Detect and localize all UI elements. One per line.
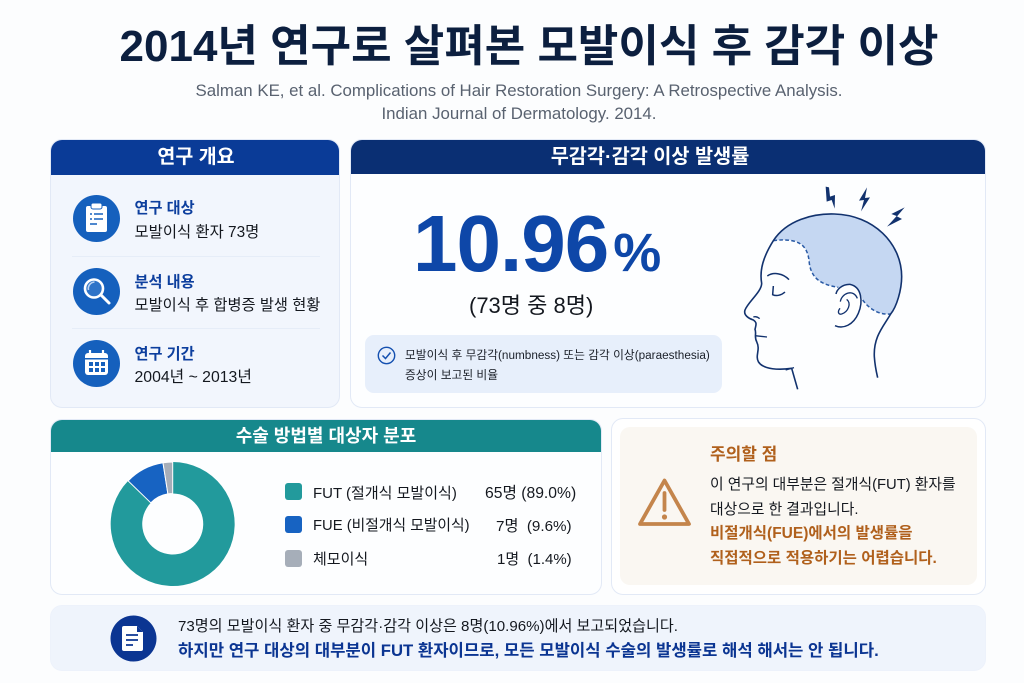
heading: study overview [50, 139, 340, 175]
citation: Indian Journal of Dermatology. 2014. [382, 104, 656, 123]
icon: head with affected scalp and lightning bolts [744, 186, 905, 390]
caution heading: 주의할 점 [710, 444, 777, 464]
legend label: FUT: FUT (절개식 모발이식) [313, 484, 457, 502]
summary line 2: 하지만 연구 대상의 대부분이 FUT 환자이므로, 모든 모발이식 수술의 발생률로 해석 해서는 안 됩니다. [178, 641, 879, 660]
note text: 모발이식 후 무감각(numbness) 또는 감각 이상(paraesthesia) [405, 349, 710, 362]
caution text: 대상으로 한 결과입니다. [710, 502, 858, 518]
heading: incidence: 무감각·감각 이상 발생률 [551, 146, 749, 168]
icon: warning triangle [638, 478, 691, 526]
legend value: body hair: 1명 (1.4%) [497, 550, 572, 568]
heading: distribution: 수술 방법별 대상자 분포 [236, 426, 416, 446]
title: 2014년 연구로 살펴본 모발이식 후 감각 이상 [120, 22, 938, 71]
legend swatch: body hair [285, 550, 302, 567]
divider row: analysis [72, 140, 320, 329]
panel: distribution by surgical method [50, 419, 602, 595]
donut chart [110, 462, 235, 586]
caution text [710, 476, 956, 566]
label: analysis content: 분석 내용 [134, 274, 195, 290]
icon: check [378, 346, 396, 364]
label: study period: 연구 기간 [134, 346, 195, 362]
citation: Salman KE, et al. Complications of Hair Restoration Surgery: A Retrospective Analysis. [196, 81, 842, 100]
text: study subject: 모발이식 환자 73명 [134, 224, 259, 240]
panel: study overview [50, 139, 340, 408]
note box [365, 335, 722, 393]
summary line 1: 73명의 모발이식 환자 중 무감각·감각 이상은 8명(10.96%)에서 보고되었습니다. [178, 618, 678, 635]
heading: distribution [50, 419, 602, 452]
panel: summary [50, 605, 986, 671]
caution text: 비절개식(FUE)에서의 발생률을 [710, 525, 912, 542]
divider row: subject [72, 140, 320, 257]
icon: calendar [73, 340, 120, 387]
icon: document [110, 616, 156, 662]
icon: clipboard [73, 195, 120, 242]
text: analysis content: 모발이식 후 합병증 발생 현황 [134, 297, 320, 314]
caution text: 이 연구의 대부분은 절개식(FUT) 환자를 [710, 477, 956, 493]
panel: caution [611, 418, 986, 595]
stat detail: (73명 중 8명) [469, 292, 593, 318]
heading: incidence [350, 139, 986, 174]
icon: magnifier [73, 268, 120, 315]
caution inner box [620, 427, 977, 585]
legend label: body hair: 체모이식 [313, 550, 368, 568]
legend swatch: FUT [285, 483, 302, 500]
legend value: FUT: 65명 (89.0%) [485, 484, 576, 502]
panel: incidence [350, 139, 986, 408]
legend label: FUE: FUE (비절개식 모발이식) [313, 518, 470, 534]
note text: 증상이 보고된 비율 [405, 369, 498, 382]
label: study subject: 연구 대상 [134, 200, 195, 216]
text: study period: 2004년 ~ 2013년 [134, 368, 252, 386]
note text [405, 348, 710, 382]
citation [196, 81, 842, 123]
big stat: 10.96% [413, 199, 660, 288]
legend swatch: FUE [285, 516, 302, 533]
legend value: FUE: 7명 (9.6%) [496, 518, 572, 534]
caution text: 직접적으로 적용하기는 어렵습니다. [710, 550, 937, 566]
heading: study overview: 연구 개요 [157, 146, 235, 168]
